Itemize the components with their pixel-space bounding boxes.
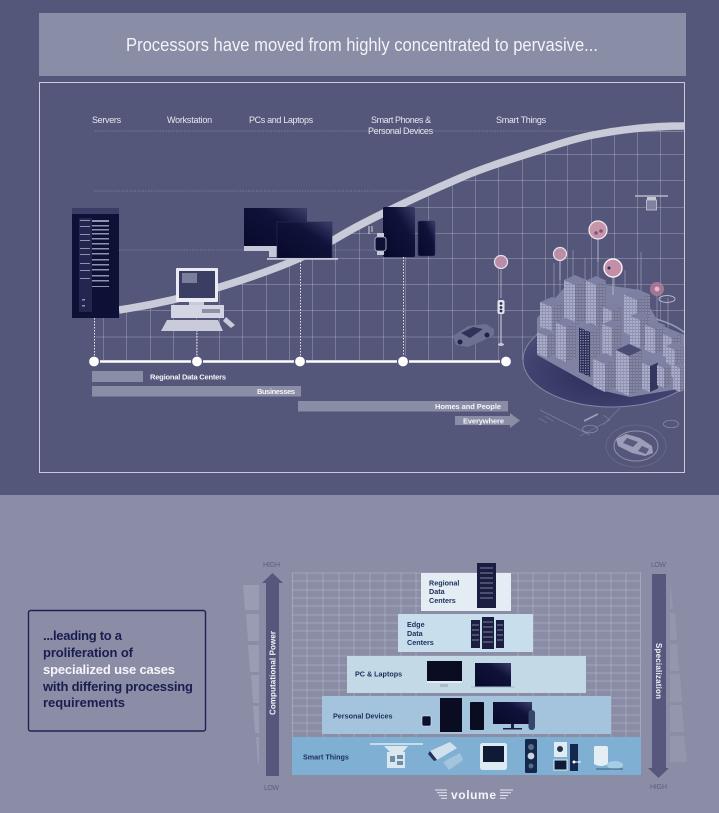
icon: smart door devices <box>554 742 581 771</box>
bar: homes and people: Homes and People <box>435 402 501 411</box>
category labels: Workstation <box>167 115 212 125</box>
tier: regional data centers: Data <box>429 587 446 596</box>
axis label: low right: LOW <box>651 562 666 569</box>
callout: specialized use cases: specialized use cases <box>43 662 175 677</box>
icon: desktop and laptop <box>244 208 338 260</box>
icon: delivery drone <box>370 744 423 768</box>
dotted drop lines <box>94 257 404 356</box>
decoration: right ascending wedges <box>670 583 687 762</box>
tier: personal devices <box>322 696 611 734</box>
decoration: left ascending wedges <box>243 585 259 763</box>
city buildings <box>537 275 687 397</box>
category labels: Smart Phones & <box>371 115 431 125</box>
category labels: PCs and Laptops <box>249 115 314 125</box>
icon: phone, tablet and watch <box>369 207 435 257</box>
timeline <box>88 356 512 367</box>
adoption curve <box>119 126 684 310</box>
axis: computational power: Computational Power <box>268 631 278 715</box>
icon: security camera <box>428 742 463 770</box>
category labels: Servers <box>92 115 122 125</box>
tier: regional data centers: Regional <box>429 578 459 588</box>
city antennas <box>554 239 668 335</box>
icon: smart speakers <box>594 746 623 769</box>
icon: drone <box>635 196 668 210</box>
callout: specialized use cases: ...leading to a <box>43 628 123 643</box>
tier: PC and laptops: PC & Laptops <box>355 670 402 678</box>
tier: regional data centers: Centers <box>429 596 456 605</box>
bar: regional data centers <box>92 371 226 382</box>
tier: smart things: Smart Things <box>303 752 349 762</box>
tier: edge data centers: Edge <box>407 620 425 629</box>
arrow: everywhere: Everywhere <box>463 416 504 426</box>
tier: personal devices: Personal Devices <box>333 712 393 720</box>
pin: wifi city <box>554 248 566 280</box>
callout: specialized use cases <box>28 610 206 731</box>
axis: computational power <box>262 573 283 776</box>
dotted reference lines <box>94 131 684 250</box>
tier: edge data centers <box>398 614 533 652</box>
icon: smart traffic light <box>494 256 508 346</box>
axis title: volume <box>435 788 513 802</box>
icon: workstation <box>161 268 235 331</box>
arrow: everywhere <box>455 413 520 428</box>
callout: specialized use cases: with differing processing <box>42 679 193 694</box>
background: lower section <box>0 495 719 813</box>
lower circuit marks <box>539 408 678 436</box>
illustration: smart city <box>523 221 701 467</box>
icon: server rack <box>72 208 119 318</box>
title: Processors have moved from highly concentrated to pervasive... <box>126 35 598 55</box>
axis label: high right: HIGH <box>650 784 667 791</box>
pin: signal <box>650 282 675 302</box>
bar: businesses: Businesses <box>257 387 295 396</box>
pin: camera <box>604 259 622 295</box>
callout: specialized use cases: requirements <box>43 695 125 710</box>
tier: edge data centers: Data <box>407 629 424 638</box>
background: upper section <box>0 0 719 495</box>
panel: processor evolution <box>40 82 701 472</box>
axis: specialization: Specialization <box>654 643 663 699</box>
bar: homes and people <box>298 401 508 412</box>
pin: music <box>589 221 607 262</box>
icon: car <box>453 324 494 347</box>
callout: specialized use cases: proliferation of <box>43 645 134 660</box>
panel: pyramid chart <box>292 563 641 775</box>
icon: thermostat <box>480 743 507 770</box>
axis title: volume: volume <box>451 788 496 802</box>
category labels <box>92 115 547 136</box>
bar: regional data centers: Regional Data Centers <box>150 372 226 382</box>
bar: businesses <box>92 386 301 396</box>
tier: smart things <box>292 737 641 775</box>
tier: regional data centers <box>421 563 511 611</box>
axis label: high left: HIGH <box>263 562 280 569</box>
chart grid <box>292 573 641 737</box>
tier: edge data centers: Centers <box>407 638 434 647</box>
tier: PC and laptops <box>347 656 586 693</box>
city platform <box>522 318 684 408</box>
title banner <box>39 13 686 76</box>
category labels: Personal Devices <box>368 126 434 136</box>
icon: connected car <box>606 425 666 467</box>
axis label: low left: LOW <box>264 785 279 792</box>
category labels: Smart Things <box>496 115 547 125</box>
axis: specialization <box>648 574 669 778</box>
icon: speaker <box>525 739 537 773</box>
